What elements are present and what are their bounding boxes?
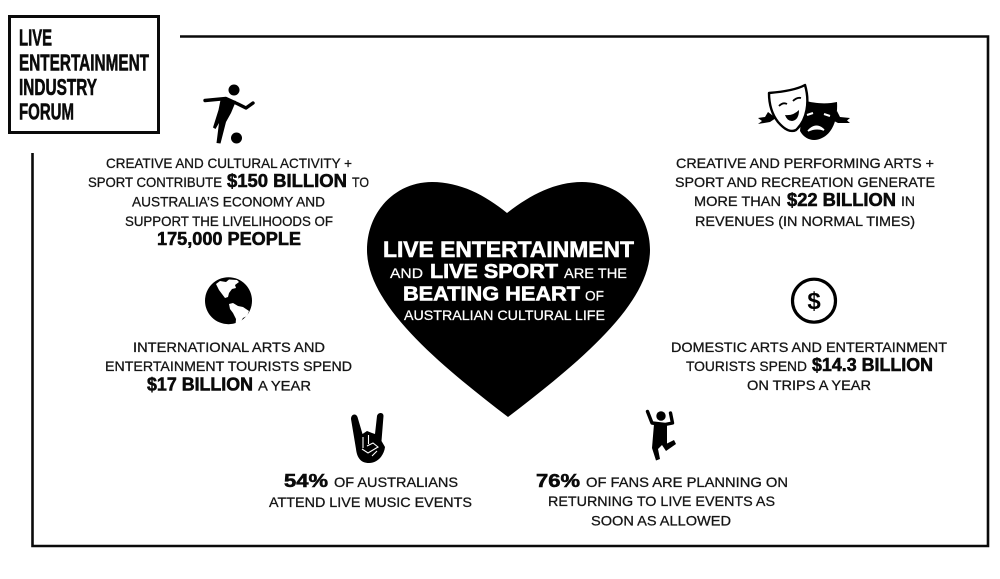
logo: Live Entertainment Industry Forum [10,16,158,132]
heart shape [367,182,650,417]
text: $22 billion: SPORT AND RECREATION GENERATE [675,174,935,190]
text: $150 billion: $150 BILLION [227,171,347,191]
panel: returning fans [536,411,788,529]
text: $150 billion [88,155,369,249]
panel: domestic tourists [671,279,947,393]
text: $22 billion: CREATIVE AND PERFORMING ARTS + [676,155,934,171]
text: 54%: 54% [284,471,328,491]
panel: arts revenues [675,85,935,229]
text: $17 billion: $17 BILLION [147,374,253,394]
text: 76%: OF FANS ARE PLANNING ON [586,474,788,490]
panel: economy contribution [88,84,369,249]
heart text: ARE THE [564,265,627,281]
text: $150 billion: TO [352,174,369,190]
text: $22 billion: REVENUES (IN NORMAL TIMES) [695,213,915,229]
text: $150 billion: SUPPORT THE LIVELIHOODS OF [125,213,333,229]
text: $22 billion: $22 BILLION [787,190,896,210]
heart text: LIVE ENTERTAINMENT [383,237,635,262]
panel: live music [269,413,472,510]
text: $150 billion: SPORT CONTRIBUTE [88,174,222,190]
heart text [383,237,635,323]
heart text: AUSTRALIAN CULTURAL LIFE [404,307,605,323]
text: $17 billion [105,339,352,394]
icon: dollar coin: $ [807,288,821,315]
text: 54% [269,471,472,510]
icon: rock hand [351,413,385,463]
text: 76% [536,471,788,529]
text: 76%: 76% [536,471,580,491]
text: 76%: RETURNING TO LIVE EVENTS AS [548,493,775,509]
icon: dollar coin [792,279,836,322]
text: $14.3 billion: $14.3 BILLION [812,355,933,375]
text: $17 billion: A YEAR [258,378,311,394]
text: 54%: OF AUSTRALIANS [334,474,458,490]
heart text: OF [585,288,604,304]
text: $14.3 billion: TOURISTS SPEND [686,358,807,374]
logo: Live Entertainment Industry Forum: LIVE [19,24,52,50]
text: $22 billion: IN [901,193,915,209]
text: $150 billion: AUSTRALIA’S ECONOMY AND [132,194,325,210]
logo: Live Entertainment Industry Forum: ENTERTAINMENT [19,50,149,76]
heart text: BEATING HEART [403,284,580,306]
text: $150 billion: 175,000 PEOPLE [157,229,301,249]
icon: footballer [205,84,253,144]
icon: globe [205,277,252,325]
icon: theatre masks [758,85,850,140]
text: $14.3 billion [671,339,947,393]
text: $17 billion: INTERNATIONAL ARTS AND [133,339,325,355]
text: $22 billion [675,155,935,229]
panel: international tourists [105,277,352,394]
panel: beating heart [367,182,650,417]
text: $14.3 billion: ON TRIPS A YEAR [747,377,871,393]
text: $14.3 billion: DOMESTIC ARTS AND ENTERTAINMENT [671,339,947,355]
icon: jumping fan [648,411,676,460]
heart text: AND [390,265,423,281]
text: $17 billion: ENTERTAINMENT TOURISTS SPEND [105,358,352,374]
heart text: LIVE SPORT [430,261,558,283]
text: $22 billion: MORE THAN [694,193,781,209]
text: $150 billion: CREATIVE AND CULTURAL ACTIVITY + [106,155,352,171]
logo: Live Entertainment Industry Forum: FORUM [19,98,74,124]
text: 76%: SOON AS ALLOWED [591,513,731,529]
logo: Live Entertainment Industry Forum: INDUSTRY [19,74,97,100]
text: 54%: ATTEND LIVE MUSIC EVENTS [269,494,472,510]
